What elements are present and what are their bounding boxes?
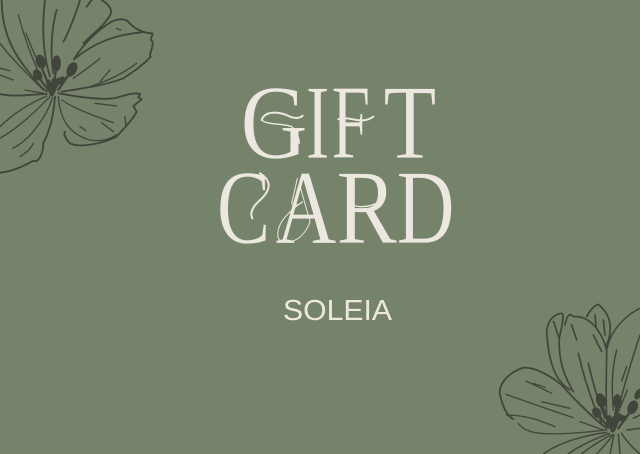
heading line: GIFT: T	[383, 64, 436, 181]
heading line: GIFT: F	[331, 65, 370, 182]
heading line: CARD: D	[396, 150, 455, 267]
heading line: GIFT: G	[240, 64, 308, 181]
ornamental swashes on title letters	[251, 113, 383, 242]
heading line: CARD: R	[336, 150, 397, 267]
brand name: SOLEIA: SOLEIA	[283, 295, 393, 327]
heading line: CARD: A	[275, 148, 337, 266]
heading line: GIFT: I	[306, 63, 330, 181]
icon: flower bottom right	[500, 304, 640, 454]
title: gift card	[217, 63, 455, 267]
icon: flower top left	[0, 0, 153, 173]
heading line: CARD: C	[217, 150, 270, 267]
heading line: CARD	[217, 148, 455, 267]
heading line: GIFT	[240, 63, 436, 182]
